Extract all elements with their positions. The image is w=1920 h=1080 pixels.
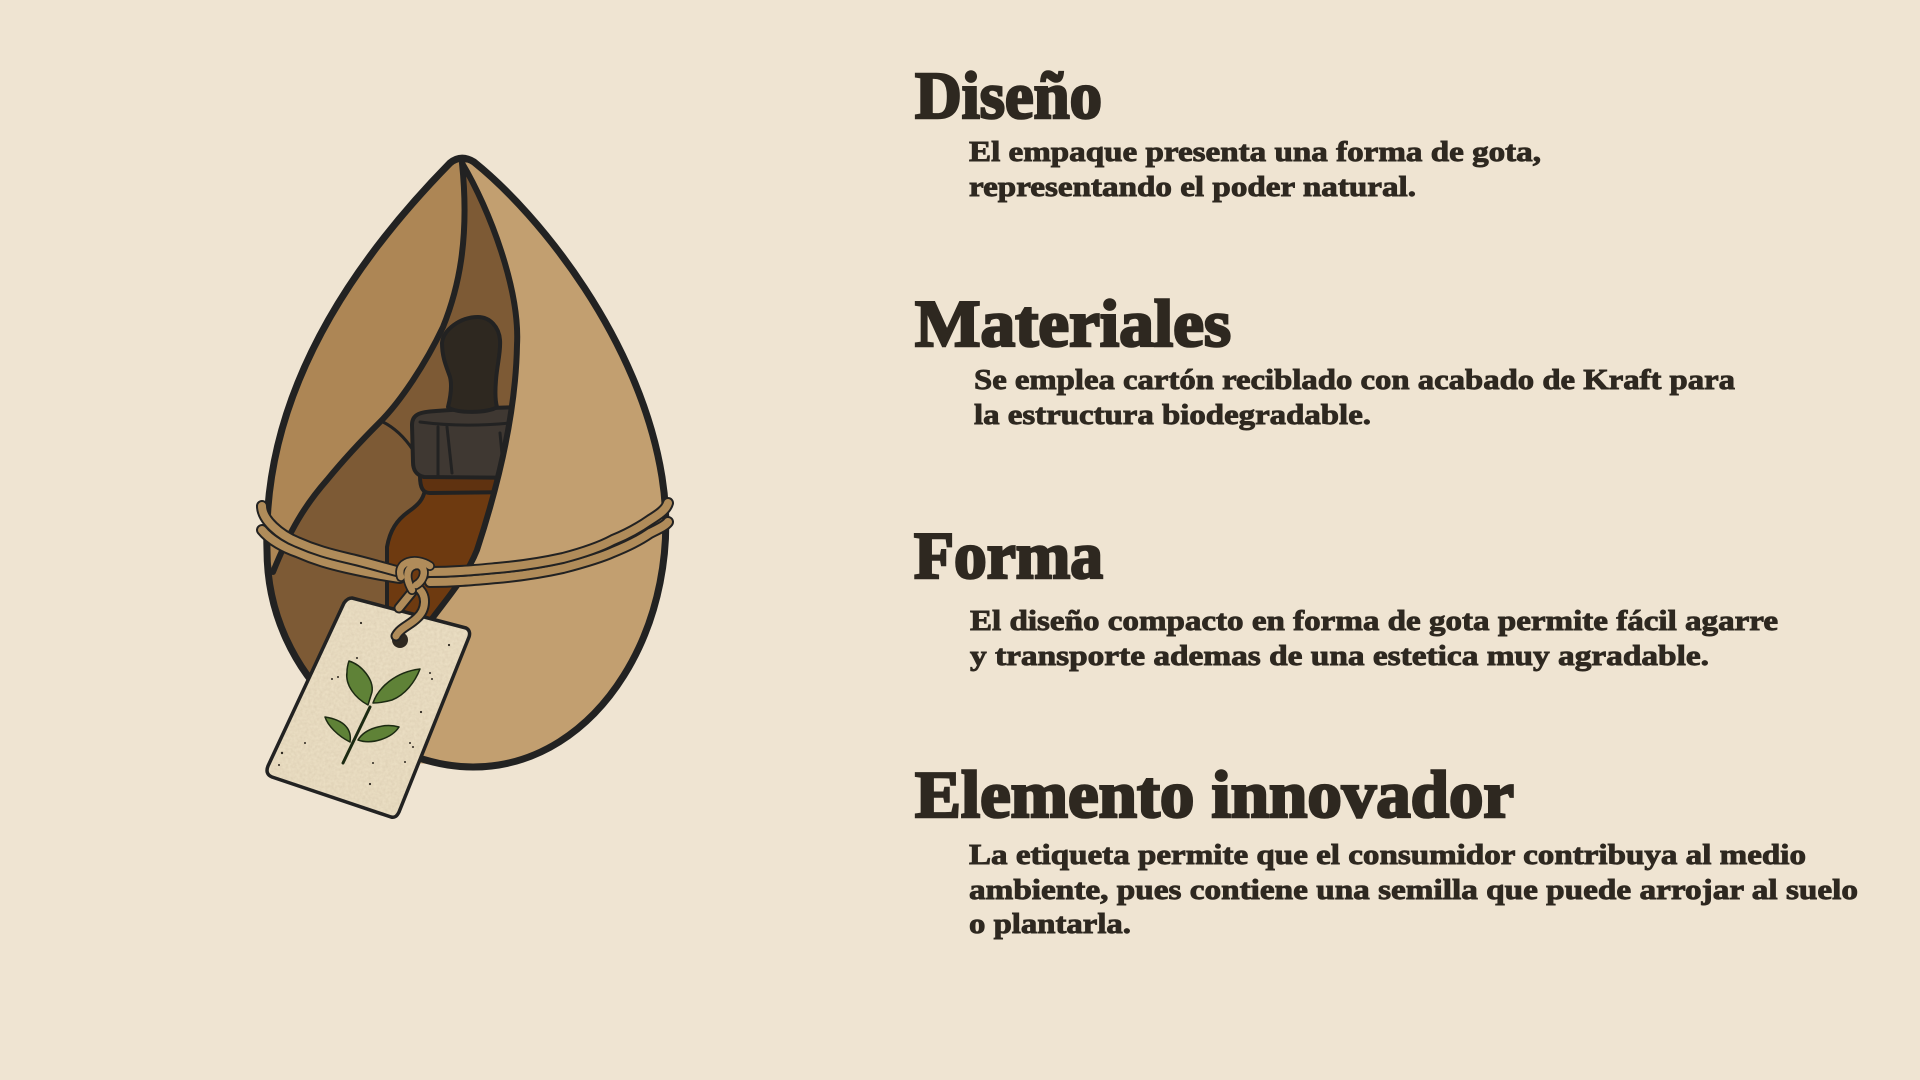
body: Diseño: El empaque presenta una forma de gota, xyxy=(969,136,1541,168)
section: Materiales xyxy=(915,287,1736,431)
body: Forma xyxy=(970,605,1778,672)
body: Forma: El diseño compacto en forma de gota permite fácil agarre xyxy=(970,605,1778,637)
body: Elemento innovador: La etiqueta permite que el consumidor contribuya al medio xyxy=(969,839,1806,871)
body: Materiales: Se emplea cartón reciblado con acabado de Kraft para xyxy=(974,364,1736,396)
section: Forma xyxy=(914,519,1778,672)
body: Materiales xyxy=(974,364,1736,431)
tag border xyxy=(267,598,470,817)
lower left leaf xyxy=(325,717,350,742)
twine around package xyxy=(262,503,668,582)
body: Diseño xyxy=(969,136,1541,203)
body: Elemento innovador: o plantarla. xyxy=(969,908,1131,940)
body: Elemento innovador xyxy=(969,839,1858,940)
section: Diseño xyxy=(915,59,1541,203)
body: Elemento innovador: ambiente, pues contiene una semilla que puede arrojar al suelo xyxy=(969,874,1858,906)
dropper cap xyxy=(412,407,530,478)
upper right leaf xyxy=(373,669,420,703)
flap edges xyxy=(273,163,517,635)
body: Materiales: la estructura biodegradable. xyxy=(974,399,1371,431)
amber dropper bottle xyxy=(387,317,530,650)
tag hole xyxy=(392,632,408,648)
heading: Forma: Forma xyxy=(914,519,1103,593)
sprig stem xyxy=(343,707,370,763)
seed tag xyxy=(267,598,470,817)
tag speckles xyxy=(278,622,450,785)
twine knot and tag loop xyxy=(396,561,430,636)
body: Forma: y transporte ademas de una estetica muy agradable. xyxy=(970,640,1709,672)
heading: Diseño: Diseño xyxy=(915,59,1102,133)
package outline xyxy=(267,158,666,767)
tag card xyxy=(267,598,470,817)
leaf sprig icon xyxy=(325,661,420,763)
rubber bulb xyxy=(442,317,500,412)
inner fold line xyxy=(383,422,413,450)
heading: Materiales: Materiales xyxy=(915,287,1231,361)
heading: Elemento innovador: Elemento innovador xyxy=(915,758,1514,832)
right flap xyxy=(400,162,666,767)
cap ridges xyxy=(420,422,520,475)
left flap xyxy=(267,160,465,572)
lower right leaf xyxy=(358,726,399,742)
upper left leaf xyxy=(347,661,372,705)
body: Diseño: representando el poder natural. xyxy=(969,171,1416,203)
bottle body xyxy=(387,490,520,650)
bottle neck xyxy=(420,476,515,493)
package interior xyxy=(267,158,666,767)
section: Elemento innovador xyxy=(915,758,1858,940)
illustration: drop-shaped kraft package xyxy=(262,158,668,817)
